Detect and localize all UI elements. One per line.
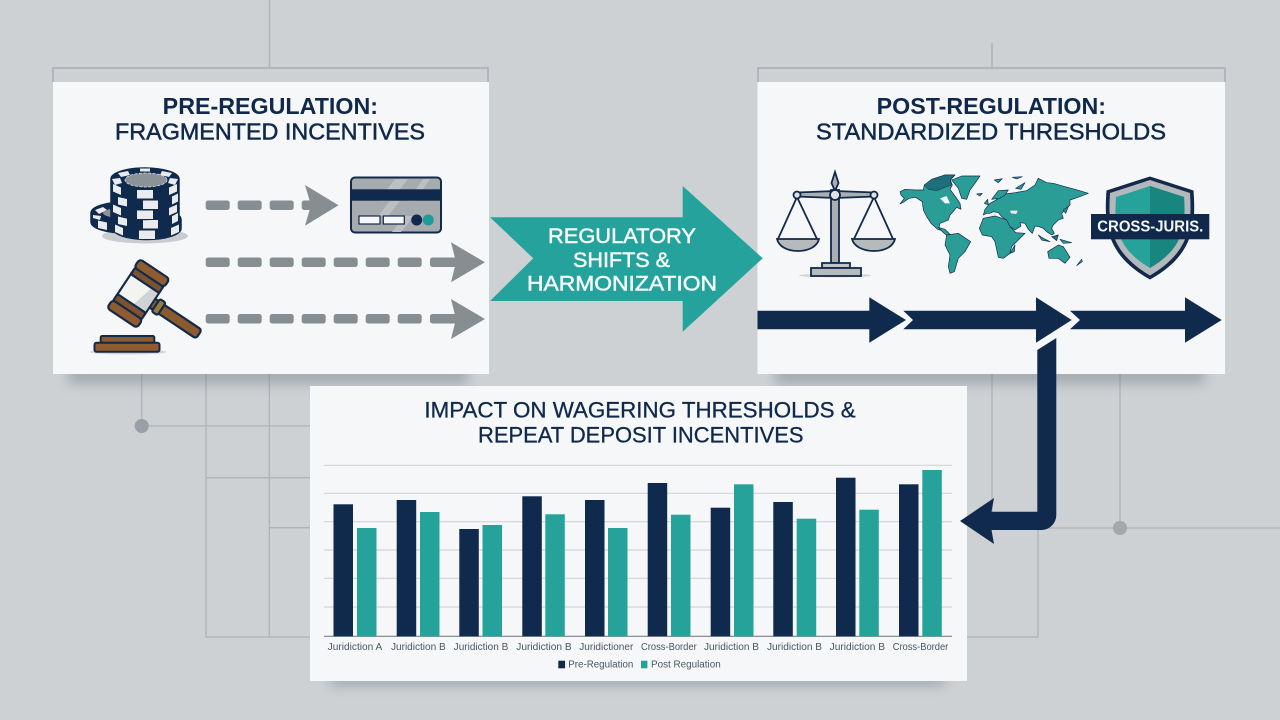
process arrows	[758, 297, 1222, 343]
arrow: regulatory shifts and harmonization: HARMONIZATION	[527, 272, 717, 296]
network node right	[1113, 521, 1127, 535]
panel: post-regulation	[758, 82, 1225, 374]
bar chart	[324, 465, 952, 671]
axis labels: Cross-Border	[641, 642, 697, 653]
arrow: regulatory shifts and harmonization: REGULATORY	[548, 225, 696, 248]
legend	[558, 660, 721, 671]
heading: post-regulation: POST-REGULATION:	[877, 93, 1106, 119]
icon: credit card	[351, 178, 441, 232]
legend: Post Regulation	[651, 660, 721, 671]
heading: impact	[424, 398, 856, 447]
dashed arrow: middle row	[206, 242, 485, 282]
panel: pre-regulation	[53, 82, 489, 374]
bars: pre-regulation	[334, 478, 918, 636]
arrow: regulatory shifts and harmonization	[490, 186, 763, 332]
heading: post-regulation	[816, 93, 1166, 144]
icon: shield with cross-jurisdiction banner	[1091, 176, 1209, 280]
bars: post-regulation	[357, 470, 942, 636]
icon: world map	[900, 175, 1088, 273]
panel: impact chart	[310, 386, 967, 681]
icon: casino chips	[91, 168, 188, 244]
axis labels: Juridiction B	[454, 642, 509, 653]
axis labels: Juridiction B	[391, 642, 446, 653]
network node left	[135, 419, 149, 433]
icon: balance scales	[777, 172, 895, 277]
dashed arrow: bottom row	[206, 299, 485, 339]
heading: post-regulation: STANDARDIZED THRESHOLDS	[816, 118, 1166, 144]
heading: impact: IMPACT ON WAGERING THRESHOLDS &	[424, 398, 856, 423]
heading: pre-regulation	[115, 93, 425, 144]
axis labels: Juridiction B	[516, 642, 572, 653]
axis labels: Juridiction B	[704, 642, 759, 653]
icon: shield with cross-jurisdiction banner: CROSS-JURIS.	[1097, 219, 1203, 236]
heading: pre-regulation: FRAGMENTED INCENTIVES	[115, 118, 425, 144]
arrow: connector from post-regulation to chart	[960, 338, 1056, 544]
legend: Pre-Regulation	[568, 660, 633, 671]
axis labels	[328, 642, 949, 653]
panel shadows	[68, 366, 1205, 686]
icon: gavel	[90, 259, 215, 359]
arrow: regulatory shifts and harmonization: SHIFTS &	[573, 249, 670, 272]
heading: pre-regulation: PRE-REGULATION:	[163, 93, 378, 119]
axis labels: Juridiction B	[767, 642, 822, 653]
axis labels: Juridictioner	[579, 642, 634, 653]
axis labels: Cross-Border	[893, 642, 949, 653]
axis labels: Juridiction A	[328, 642, 383, 653]
dashed arrow: chips to card	[206, 185, 338, 226]
axis labels: Juridiction B	[830, 642, 885, 653]
heading: impact: REPEAT DEPOSIT INCENTIVES	[478, 422, 804, 447]
